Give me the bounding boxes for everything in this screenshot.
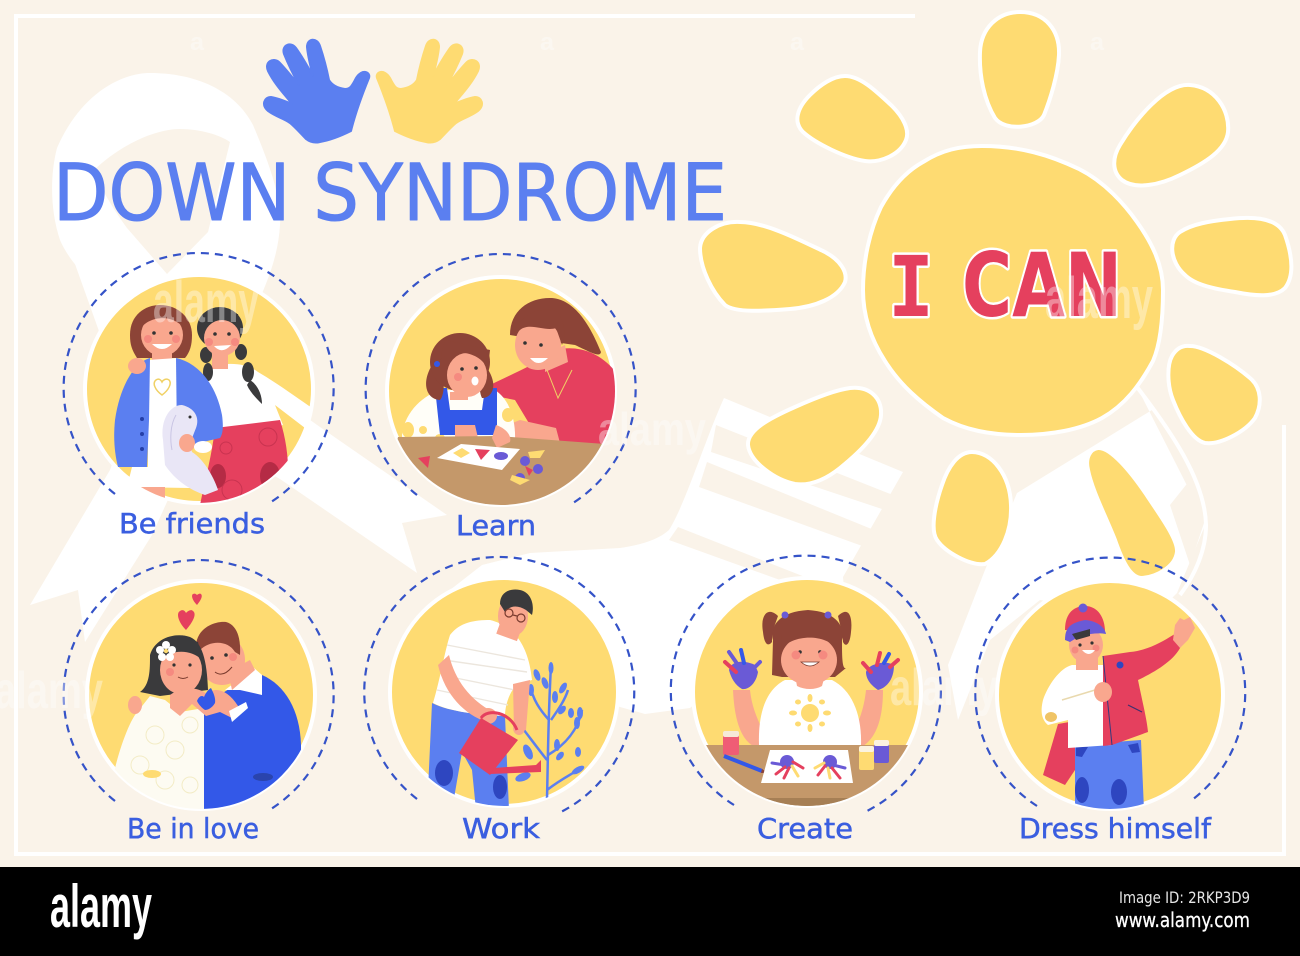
ray: lower left: [748, 388, 881, 484]
background awareness ribbon, right with striped panel: [450, 387, 1206, 720]
sun caption: I CAN: [888, 234, 1122, 337]
yellow disc: [87, 581, 315, 809]
sun caption: I CAN: I: [888, 238, 934, 336]
illustration: man watering a plant: [428, 590, 586, 810]
plant: [520, 665, 582, 798]
footer logo: alamy: [50, 873, 152, 940]
panel: Create: [671, 556, 941, 845]
dashed ring: [64, 253, 334, 502]
ray: top left: [797, 76, 907, 161]
yellow disc: [387, 277, 615, 505]
sun body: [863, 146, 1163, 435]
yellow disc: [997, 581, 1223, 809]
yellow disc: [693, 578, 921, 806]
illustration: mother teaching girl shapes: [398, 298, 615, 505]
illustration: two friends with bunny: [114, 305, 318, 507]
shirt sun: [789, 694, 831, 732]
icon: large heart: [178, 610, 195, 630]
sun with rays: [700, 12, 1291, 578]
ray: right: [1172, 218, 1291, 295]
ray: bottom: [934, 452, 1011, 564]
yellow disc: [85, 275, 313, 503]
background awareness ribbon, left: [30, 73, 447, 642]
website: www.alamy.com: [1115, 908, 1250, 932]
label: Learn: [456, 509, 536, 542]
dashed ring: [671, 556, 941, 811]
panel: Be in love: [64, 560, 334, 845]
illustration: boy putting on jacket: [1042, 604, 1195, 812]
panel: Learn: [366, 254, 636, 542]
watermarks: alamy: [598, 403, 706, 455]
footer bar: [0, 867, 1300, 956]
yellow disc: [390, 578, 618, 806]
sun caption: I CAN: CAN: [962, 234, 1122, 337]
title: DOWN SYNDROME: [53, 149, 727, 239]
panel: Work: [364, 557, 634, 845]
image id: Image ID: 2RKP3D9: [1119, 888, 1250, 907]
illustration: girl with painted hands: [706, 610, 908, 806]
watermarks: a: [1090, 29, 1105, 56]
icon: blue hand print: [264, 40, 369, 143]
painted left hand: [725, 650, 760, 689]
watermarks: alamy: [153, 270, 259, 335]
flower: [156, 641, 176, 661]
ray: top right: [1114, 85, 1228, 185]
dashed ring: [366, 254, 636, 503]
panel: Be friends: [64, 253, 334, 540]
watermarks: a: [540, 29, 555, 56]
panel: Dress himself: [975, 558, 1245, 845]
dashed ring: [364, 557, 634, 812]
paper with hand prints: [761, 750, 853, 783]
icon: small heart: [192, 594, 202, 605]
ray: left: [700, 222, 846, 311]
label: Be friends: [119, 507, 265, 540]
label: Be in love: [127, 812, 259, 845]
watermarks: alamy: [890, 659, 998, 717]
ray: top: [980, 12, 1059, 127]
crayon: [724, 756, 762, 771]
label: Create: [757, 812, 853, 845]
label: Dress himself: [1019, 812, 1212, 845]
ray: long lower right: [1087, 448, 1177, 578]
illustration: couple forming a heart: [108, 594, 301, 812]
icon: yellow hand print: [377, 40, 482, 143]
dashed ring: [975, 558, 1245, 806]
watermarks: alamy: [1045, 266, 1153, 331]
ray: lower right: [1168, 346, 1260, 443]
watermarks: a: [190, 29, 205, 56]
dashed ring: [64, 560, 334, 809]
label: Work: [462, 812, 541, 845]
watermarks: a: [790, 29, 805, 56]
watermarks: [0, 29, 1153, 720]
painted right hand: [863, 653, 898, 690]
paint jars: [723, 736, 739, 755]
